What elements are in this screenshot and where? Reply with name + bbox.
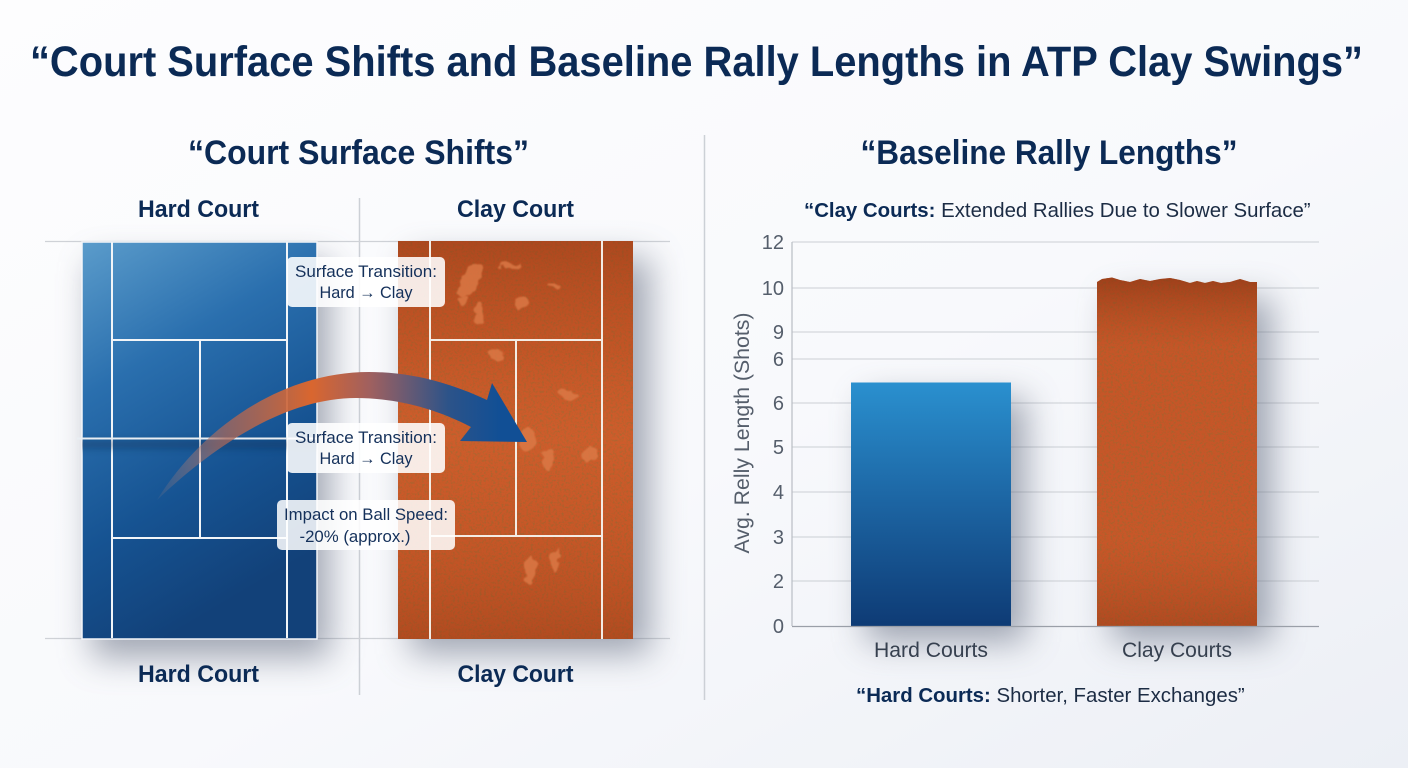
y axis title: Avg. Relly Length (Shots) [731, 312, 754, 554]
y axis tick labels: 6 [773, 349, 784, 371]
callout: impact on ball speed: -20% (approx.) [300, 527, 410, 546]
x axis label: hard courts: Hard Courts [874, 639, 988, 662]
callout: impact on ball speed [277, 500, 455, 550]
y axis tick labels: 3 [773, 527, 784, 549]
panel: court surface shifts [45, 134, 670, 695]
y axis tick labels: 6 [773, 393, 784, 415]
callout: surface transition middle [287, 423, 445, 473]
note: hard courts: “Hard Courts: Shorter, Faster Exchanges” [856, 685, 1245, 707]
arrow: hard to clay transition [157, 372, 527, 500]
bar: hard courts [851, 382, 1026, 642]
label: clay court top: Clay Court [457, 196, 574, 223]
hard court [70, 242, 330, 658]
panel: baseline rally lengths [731, 134, 1319, 707]
callout: surface transition top: Surface Transition: [295, 262, 437, 281]
label: hard court top: Hard Court [138, 196, 259, 223]
label: clay court bottom: Clay Court [458, 661, 574, 688]
y axis tick labels [762, 232, 784, 638]
y axis tick labels: 4 [773, 482, 784, 504]
callout: surface transition top [287, 257, 445, 307]
x axis label: clay courts: Clay Courts [1122, 639, 1232, 662]
callout: impact on ball speed: Impact on Ball Speed: [284, 505, 448, 524]
y axis tick labels: 9 [773, 322, 784, 344]
label: hard court bottom: Hard Court [138, 661, 259, 688]
y axis tick labels: 12 [762, 232, 784, 254]
y axis tick labels: 5 [773, 437, 784, 459]
heading: court surface shifts: “Court Surface Shifts” [188, 134, 529, 172]
callout: surface transition top: Hard → Clay [320, 283, 413, 302]
note: clay courts: “Clay Courts: Extended Rallies Due to Slower Surface” [804, 200, 1311, 222]
y axis tick labels: 10 [762, 278, 784, 300]
bar: clay courts [1097, 278, 1272, 642]
bar chart [731, 232, 1319, 662]
callout: surface transition middle: Surface Transition: [295, 428, 437, 447]
callout: surface transition middle: Hard → Clay [320, 449, 413, 468]
clay court [398, 241, 650, 654]
heading: baseline rally lengths: “Baseline Rally Lengths” [860, 134, 1238, 172]
y axis tick labels: 0 [773, 616, 784, 638]
y axis tick labels: 2 [773, 571, 784, 593]
